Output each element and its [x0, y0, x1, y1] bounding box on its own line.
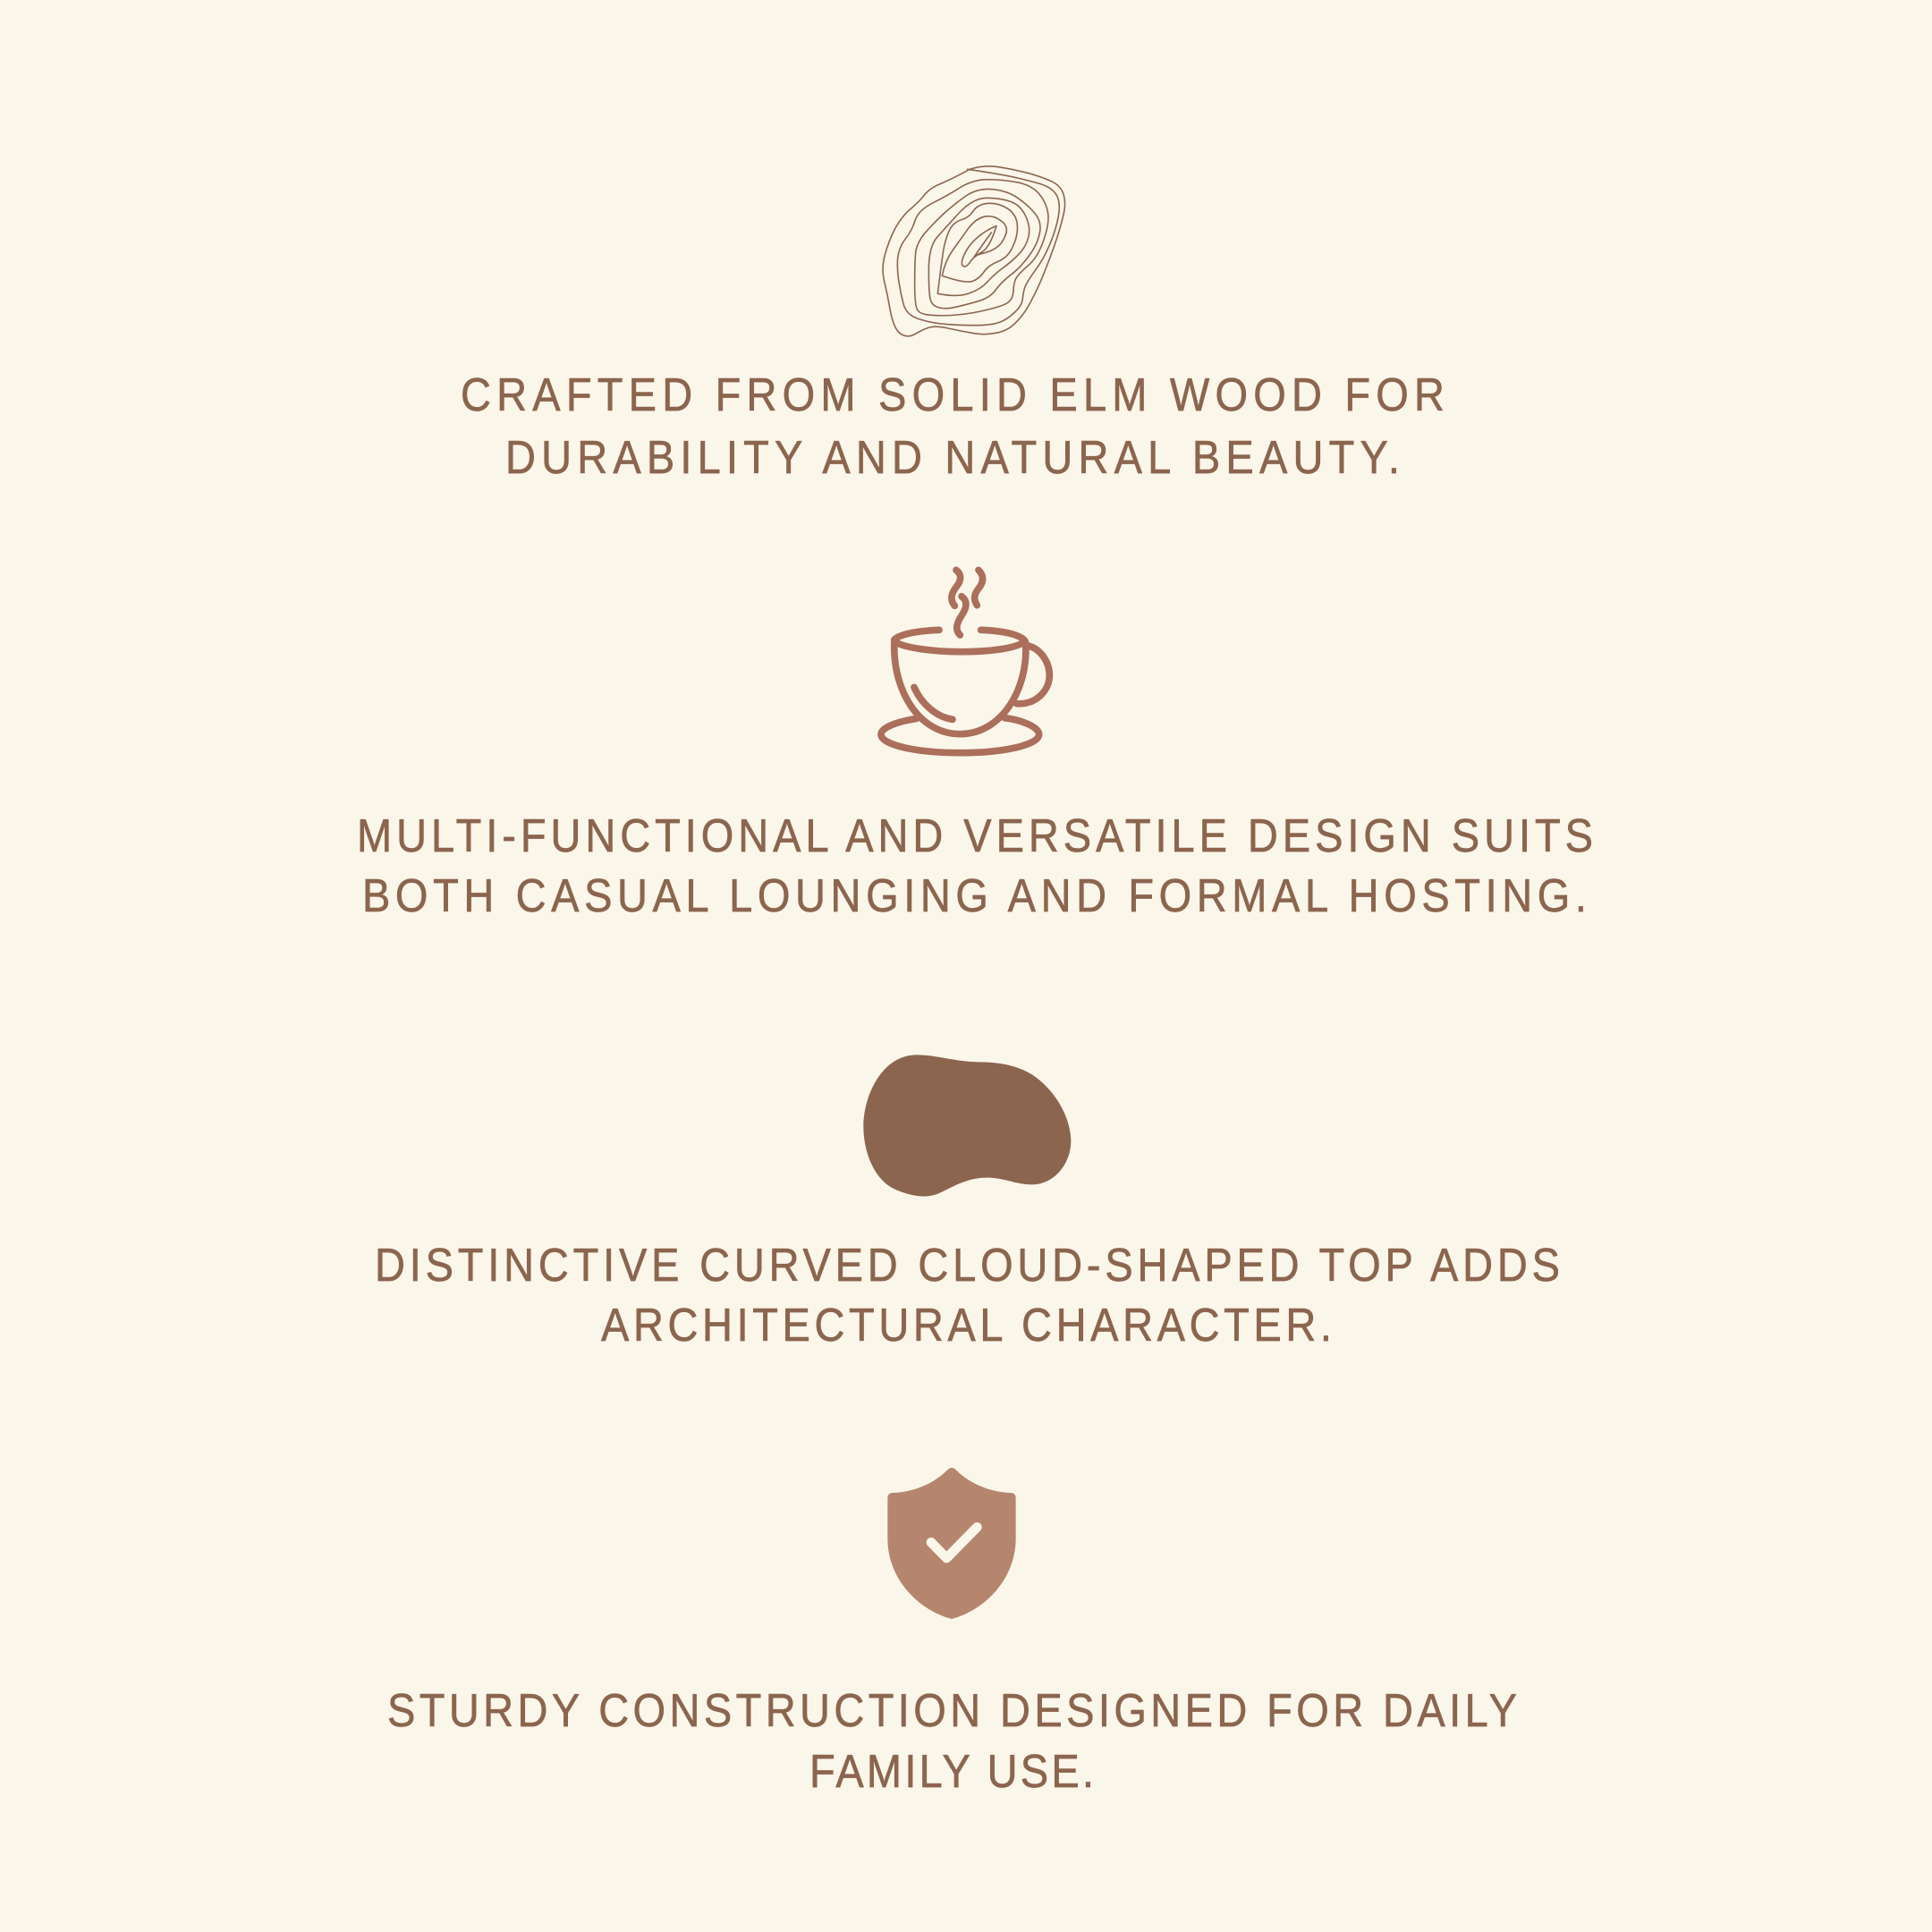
text: solid elm wood [461, 369, 1445, 484]
text: versatile design: BOTH CASUAL LOUNGING AND FORMAL HOSTING. [362, 870, 1587, 922]
icon: cloud-shaped blob [863, 1055, 1071, 1197]
text: sturdy construction [387, 1685, 1517, 1798]
panel: versatile design [357, 570, 1593, 922]
icon: shield with check [887, 1468, 1016, 1619]
text: solid elm wood: CRAFTED FROM SOLID ELM WOOD FOR [461, 369, 1445, 421]
text: cloud-shaped top: ARCHITECTURAL CHARACTER. [601, 1300, 1332, 1352]
text: solid elm wood: DURABILITY AND NATURAL BEAUTY. [505, 432, 1400, 484]
panel: solid elm wood [461, 166, 1445, 484]
panel: cloud-shaped top [375, 1055, 1560, 1352]
text: versatile design [357, 810, 1593, 922]
text: versatile design: MULTI-FUNCTIONAL AND VERSATILE DESIGN SUITS [357, 810, 1593, 862]
text: cloud-shaped top [375, 1240, 1560, 1352]
text: sturdy construction: STURDY CONSTRUCTION DESIGNED FOR DAILY [387, 1685, 1517, 1737]
text: cloud-shaped top: DISTINCTIVE CURVED CLOUD-SHAPED TOP ADDS [375, 1240, 1560, 1292]
icon: wood rings [883, 166, 1065, 336]
text: sturdy construction: FAMILY USE. [809, 1746, 1094, 1798]
icon: coffee cup [881, 570, 1049, 753]
panel: sturdy construction [387, 1468, 1517, 1798]
